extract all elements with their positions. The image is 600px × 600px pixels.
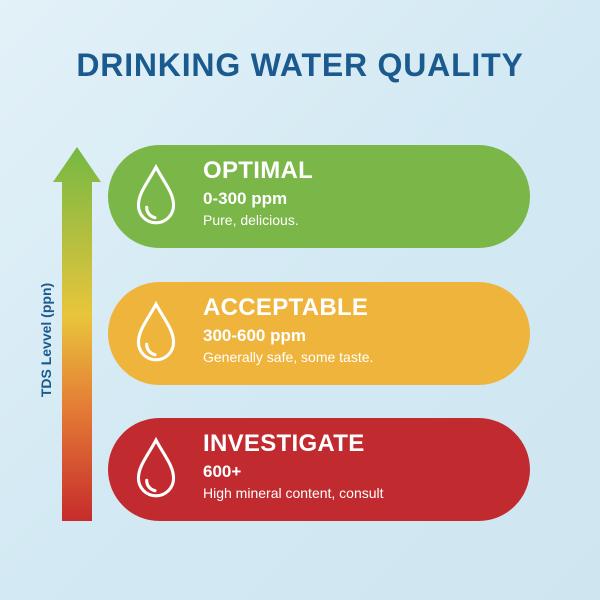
panel: optimal: OPTIMAL xyxy=(203,157,313,184)
icon: water drop xyxy=(136,164,176,224)
panel: optimal: Pure, delicious. xyxy=(203,212,299,228)
arrow: TDS scale xyxy=(53,147,101,521)
panel: optimal xyxy=(108,145,530,248)
panel: investigate: INVESTIGATE xyxy=(203,430,365,457)
icon: water drop xyxy=(136,301,176,362)
panel: acceptable: ACCEPTABLE xyxy=(203,294,368,321)
axis label: TDS Levvel (ppn) xyxy=(38,283,54,397)
panel: acceptable: Generally safe, some taste. xyxy=(203,349,373,365)
panel: investigate: High mineral content, consult xyxy=(203,485,384,501)
icon: water drop xyxy=(136,437,176,498)
title: DRINKING WATER QUALITY xyxy=(76,47,524,83)
panel: investigate xyxy=(108,418,530,521)
panel: acceptable: 300-600 ppm xyxy=(203,326,306,345)
panel: acceptable xyxy=(108,282,530,385)
panel: investigate: 600+ xyxy=(203,462,241,481)
panel: optimal: 0-300 ppm xyxy=(203,189,287,208)
